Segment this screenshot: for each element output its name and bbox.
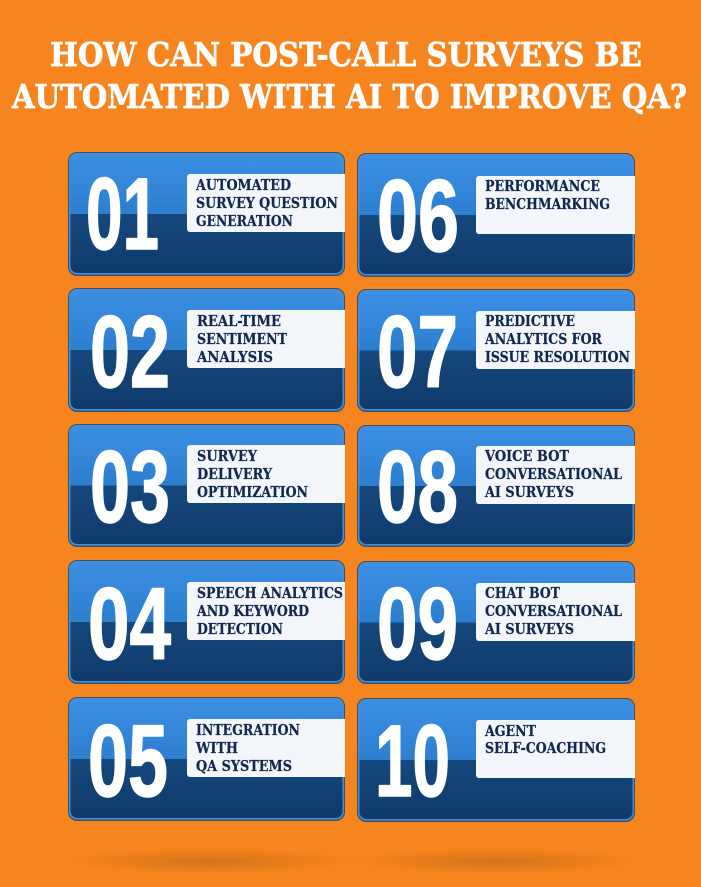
label text 02: ANALYSIS [196,349,273,366]
label ribbon 03 [187,445,345,503]
panel: 05 integration with qa systems [68,697,345,821]
floor shadows [65,848,641,874]
label ribbon 04 [187,582,345,640]
label ribbon 07 [476,311,635,369]
label text 10 [484,723,606,757]
panel: 09 chat bot conversational ai surveys [357,561,635,684]
panel: 01 automated survey question generation [68,152,345,276]
number 09: 09 [377,567,458,681]
label text 01 [195,177,338,230]
label ribbon 02 [187,310,345,368]
label text 09 [484,585,622,638]
number 06: 06 [377,159,459,273]
number 03: 03 [90,430,170,544]
number 10: 10 [375,704,450,818]
panel: 04 speech analytics and keyword detection [68,560,345,684]
label ribbon 06 [476,176,635,234]
label text 01: GENERATION [196,213,293,230]
label text 08: AI SURVEYS [484,484,574,501]
label text 09: CONVERSATIONAL [485,603,622,620]
label ribbon 10 [476,720,635,778]
label text 02: REAL-TIME [197,313,281,330]
label text 09: AI SURVEYS [484,621,574,638]
number 02: 02 [90,295,170,409]
title: HOW CAN POST-CALL SURVEYS BE [50,35,642,74]
number 07: 07 [377,295,458,409]
label text 07: ISSUE RESOLUTION [485,349,630,366]
label text 08: CONVERSATIONAL [485,466,622,483]
label text 05: WITH [195,740,238,757]
panel: 07 predictive analytics for issue resolution [357,289,635,412]
number 05: 05 [88,704,168,818]
label text 03 [197,448,308,501]
label text 01: AUTOMATED [195,177,291,194]
label text 04 [196,585,343,638]
label ribbon 09 [476,583,635,641]
panel: 08 voice bot conversational ai surveys [357,425,635,547]
label ribbon 08 [476,446,635,504]
panel: 03 survey delivery optimization [68,424,345,547]
label text 07: ANALYTICS FOR [484,331,603,348]
panel: 06 performance benchmarking [357,153,635,277]
number 04: 04 [88,567,171,681]
label text 02 [196,313,287,366]
label text 04: AND KEYWORD [196,603,309,620]
label text 10: SELF-COACHING [485,740,606,757]
label text 02: SENTIMENT [197,331,287,348]
label ribbon 05 [187,719,345,777]
label text 06: BENCHMARKING [485,196,610,213]
panel: 10 agent self-coaching [357,698,635,822]
label text 10: AGENT [484,723,536,740]
label text 03: SURVEY [197,448,258,465]
label text 06 [485,178,610,213]
title [11,35,687,116]
label text 08: VOICE BOT [484,448,569,465]
panel: 02 real-time sentiment analysis [68,288,345,412]
label text 03: OPTIMIZATION [197,484,308,501]
number 08: 08 [377,430,458,544]
label text 01: SURVEY QUESTION [196,195,338,212]
label text 08 [484,448,622,501]
number 01: 01 [86,157,159,271]
label ribbon 01 [187,174,345,232]
label text 09: CHAT BOT [485,585,560,602]
label text 06: PERFORMANCE [485,178,600,195]
label text 05: INTEGRATION [196,722,300,739]
label text 05 [195,722,300,775]
label text 03: DELIVERY [197,466,273,483]
label text 04: SPEECH ANALYTICS [197,585,343,602]
label text 07 [484,313,630,366]
label text 04: DETECTION [197,621,283,638]
label text 05: QA SYSTEMS [196,758,292,775]
label text 07: PREDICTIVE [485,313,575,330]
